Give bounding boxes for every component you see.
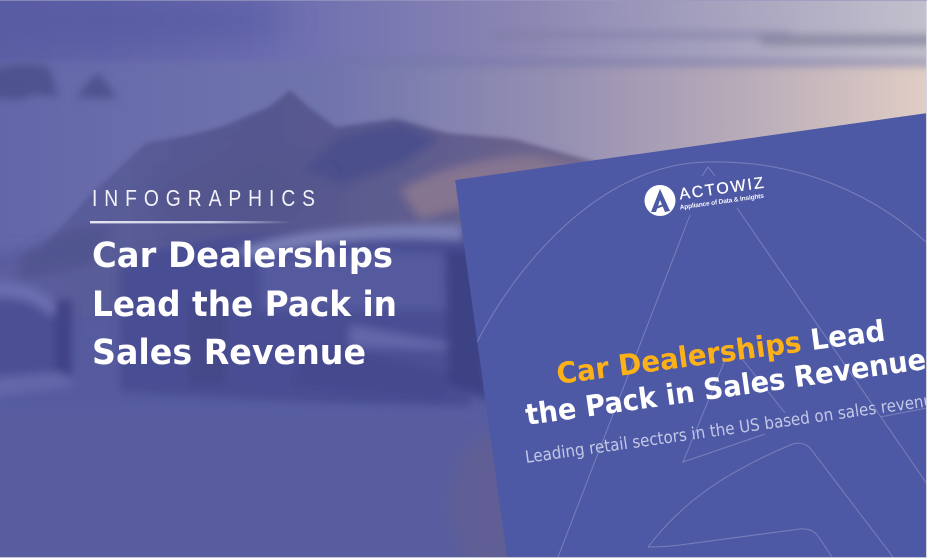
mountain bbox=[0, 90, 620, 320]
heading underline bbox=[90, 221, 293, 223]
logo wordmark: ACTOWIZ bbox=[678, 175, 765, 203]
tilted report cover panel bbox=[455, 113, 927, 558]
cover line art: logo motif bbox=[477, 162, 927, 557]
road bbox=[0, 408, 520, 558]
cars bbox=[0, 225, 490, 410]
logo tagline: Appliance of Data & Insights bbox=[679, 193, 765, 211]
distant clouds bbox=[330, 32, 927, 65]
logo mark bbox=[644, 185, 676, 216]
main title: Sales Revenue bbox=[92, 333, 366, 373]
cover title: Car Dealerships Lead bbox=[554, 313, 887, 391]
islets bbox=[0, 64, 118, 100]
heading label: INFOGRAPHICS: INFOGRAPHICS bbox=[92, 185, 315, 211]
main title bbox=[92, 236, 397, 373]
main title: Lead the Pack in bbox=[92, 285, 397, 325]
cover logo bbox=[644, 175, 765, 216]
main title: Car Dealerships bbox=[92, 236, 393, 276]
